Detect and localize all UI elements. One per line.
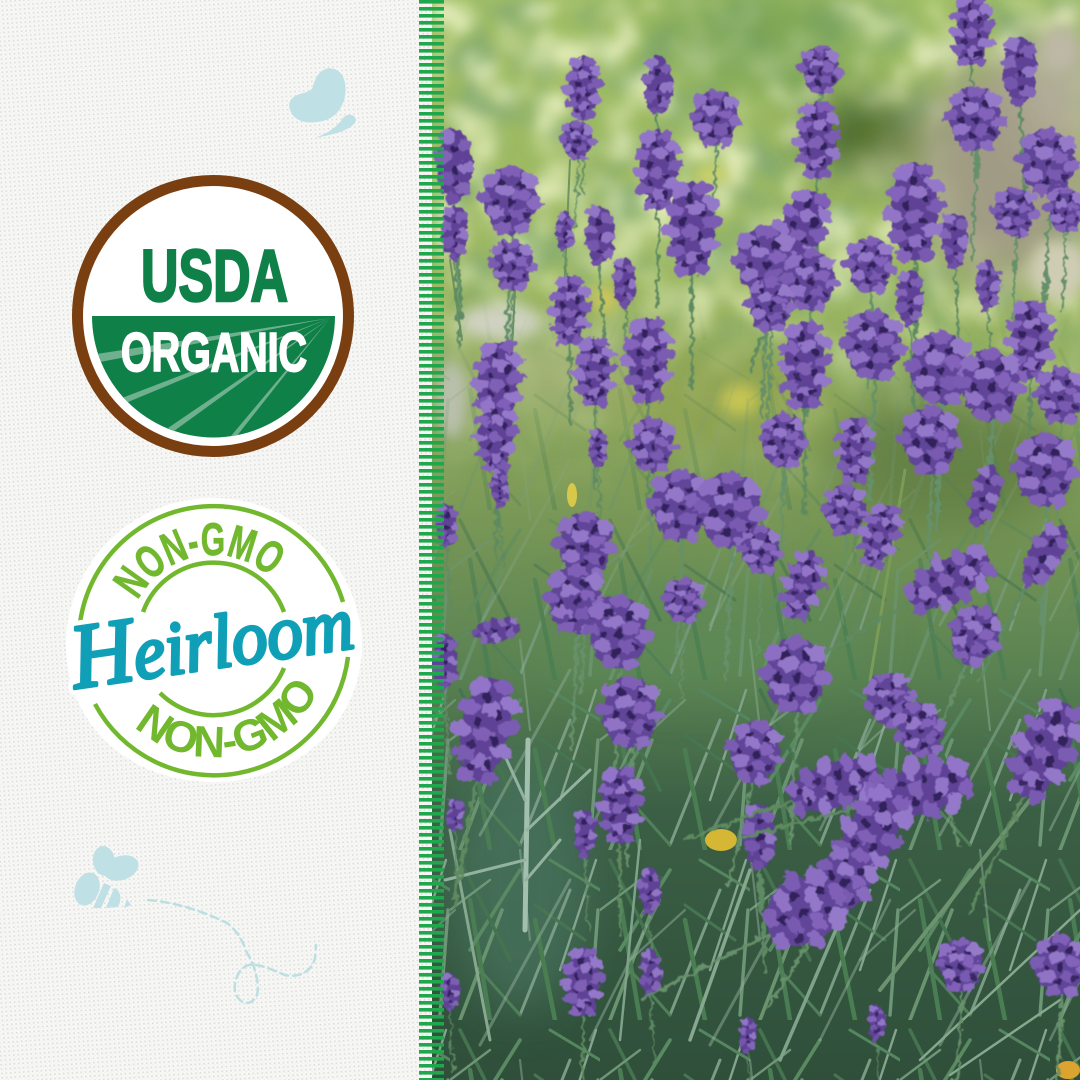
lavender photograph — [399, 0, 1080, 1080]
icon: bee with dashed flight trail — [70, 845, 316, 1003]
icon: butterfly — [289, 68, 356, 138]
USDA wordmark: USDA — [141, 236, 288, 317]
top NON-GMO curved text: NON-GMO — [112, 522, 284, 599]
green zigzag stitched border strip — [419, 0, 444, 1080]
leaves and stems texture — [432, 300, 1080, 1080]
bottom NON-GMO curved text — [136, 681, 314, 758]
badge: USDA Organic seal — [78, 180, 348, 452]
green ring arcs — [80, 506, 348, 775]
ORGANIC wordmark: ORGANIC — [121, 321, 307, 383]
Heirloom script wordmark: Heirloom — [63, 566, 359, 708]
badge: Non-GMO Heirloom seal — [63, 498, 362, 782]
soft background colour areas — [450, 0, 1080, 1010]
green field segment with rays — [90, 316, 335, 438]
lavender flower spikes — [399, 0, 1080, 1080]
linen background panel — [0, 0, 432, 1080]
mottled foliage texture — [432, 0, 1080, 520]
bottom NON-GMO curved text: NON-GMO — [136, 681, 314, 758]
pale leaf texture — [432, 434, 1080, 1080]
Heirloom script wordmark: Heirloom — [63, 566, 359, 708]
yellow blossoms — [567, 483, 1080, 1079]
grey-green stems and leaves — [445, 160, 1080, 1075]
